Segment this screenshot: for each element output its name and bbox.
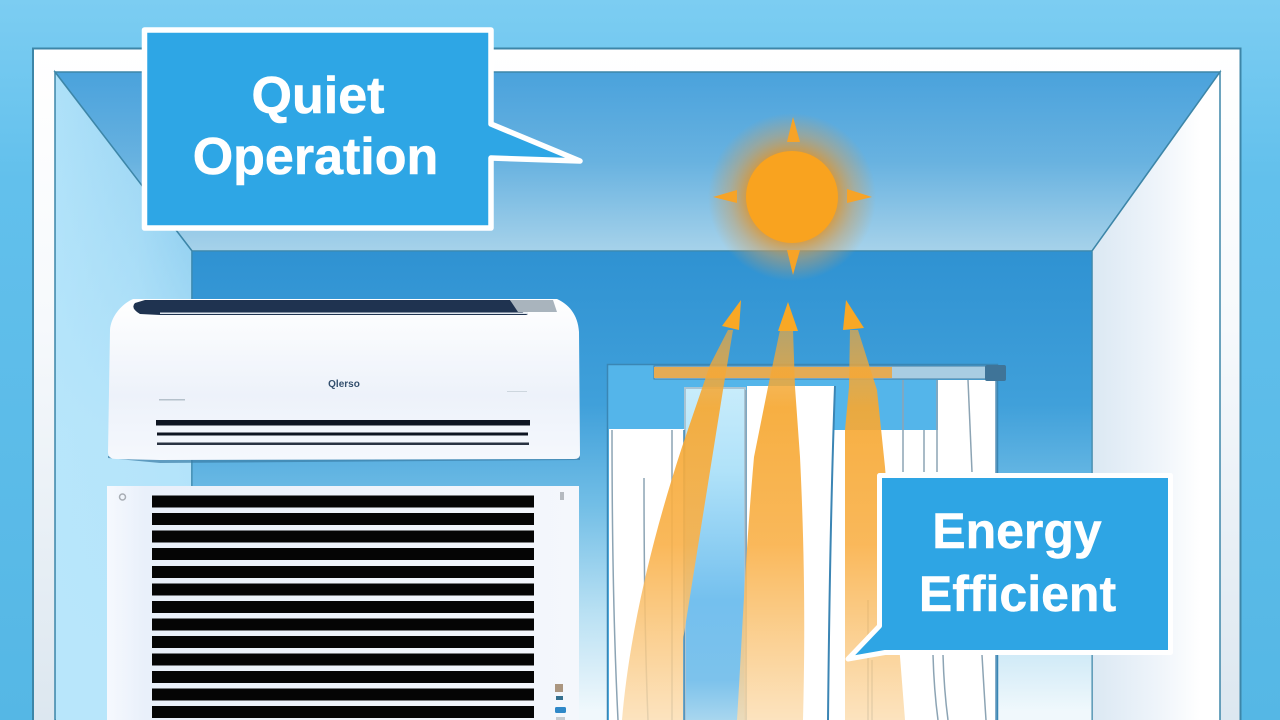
heat arrows (622, 300, 905, 720)
curtain fold lines (612, 380, 996, 720)
side marks (159, 399, 185, 400)
window glass (685, 388, 745, 720)
arrow: left (622, 300, 741, 720)
silver corner (510, 300, 557, 312)
left wall (55, 72, 192, 720)
sun ray: right (847, 189, 872, 203)
ceiling (55, 72, 1220, 251)
outlet slots (156, 420, 530, 426)
callout: energy efficient: Efficient (919, 566, 1116, 622)
callout: energy efficient (848, 476, 1170, 659)
sun ray: bottom (787, 250, 800, 275)
rod highlight (654, 367, 892, 378)
top control panel (133, 300, 528, 315)
slats (152, 496, 534, 718)
unit shadow (108, 456, 580, 463)
callout: energy efficient: Energy (932, 503, 1102, 559)
curtain: right (938, 380, 996, 720)
back wall (192, 251, 1092, 720)
right wall (1092, 72, 1220, 720)
status indicators (555, 684, 563, 692)
panel highlight (160, 312, 528, 314)
air conditioner unit (108, 299, 580, 463)
sun ray: left (713, 190, 737, 203)
callout: quiet operation: Quiet (252, 67, 384, 125)
window opening (608, 364, 998, 720)
curtain: centre (747, 386, 834, 720)
rod end cap (985, 365, 1006, 381)
window and curtains (608, 364, 1006, 720)
brand label: Qlerso (328, 379, 360, 390)
curtain: centre right (832, 430, 940, 720)
curtain: far left (609, 429, 684, 720)
vent grille (107, 486, 579, 720)
callout: quiet operation (144, 30, 580, 228)
callout: quiet operation: Operation (193, 128, 438, 186)
arrow: right (843, 300, 905, 720)
curtain rod (654, 366, 986, 379)
arrow: centre (737, 302, 804, 720)
corner marks (120, 494, 126, 500)
sun (708, 113, 876, 281)
sun ray: top (787, 117, 800, 142)
